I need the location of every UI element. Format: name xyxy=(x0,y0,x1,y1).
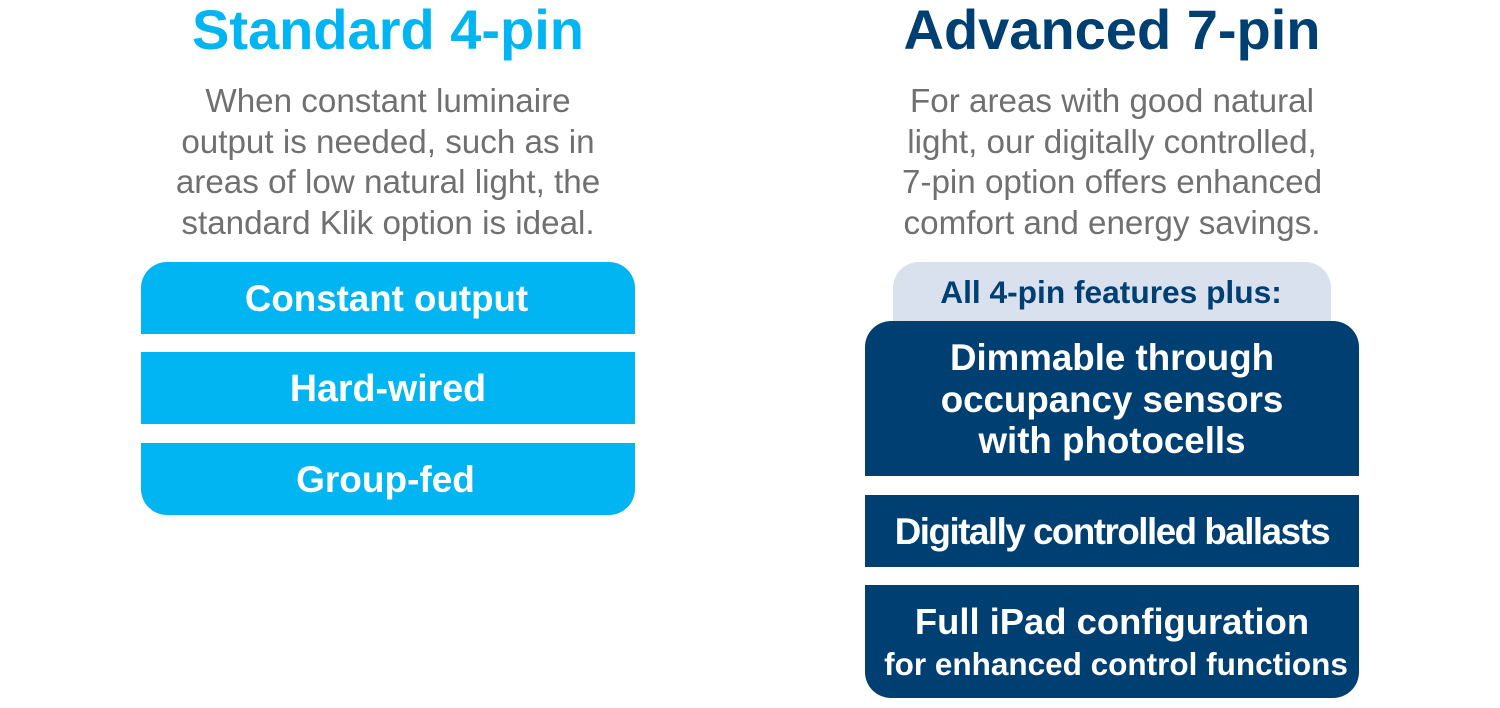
feature: Full iPad configuration: Full iPad configuration xyxy=(915,601,1309,642)
feature: Constant output: Constant output xyxy=(245,278,528,319)
feature: Hard-wired xyxy=(141,352,635,424)
panel: standard 4-pin xyxy=(176,0,600,242)
feature: Dimmable through occupancy sensors: with photocells xyxy=(978,420,1246,461)
feature: Dimmable through occupancy sensors: Dimmable through xyxy=(950,337,1274,378)
feature: Digitally controlled ballasts: Digitally controlled ballasts xyxy=(895,511,1329,552)
feature: Group-fed xyxy=(141,443,635,515)
text block: standard description: When constant luminaire xyxy=(205,83,571,120)
tab: All 4-pin features plus xyxy=(893,262,1331,332)
text block: advanced description: light, our digitally controlled, xyxy=(907,124,1317,161)
text block: advanced description: comfort and energy savings. xyxy=(904,205,1320,242)
text block: advanced description xyxy=(902,83,1322,242)
feature: Full iPad configuration xyxy=(865,585,1359,698)
feature: Hard-wired: Hard-wired xyxy=(290,367,486,409)
text block: standard description: standard Klik option is ideal. xyxy=(181,205,595,242)
tab: All 4-pin features plus: All 4-pin features plus: xyxy=(940,274,1282,310)
feature: Constant output xyxy=(141,262,635,334)
feature: Dimmable through occupancy sensors xyxy=(865,321,1359,476)
feature: Full iPad configuration: for enhanced control functions xyxy=(884,646,1348,682)
text block: standard description: areas of low natural light, the xyxy=(176,164,600,201)
feature: Group-fed: Group-fed xyxy=(296,459,475,500)
feature: Digitally controlled ballasts xyxy=(865,495,1359,567)
feature: Dimmable through occupancy sensors: occupancy sensors xyxy=(941,378,1283,420)
text block: standard description: output is needed, such as in xyxy=(181,124,595,161)
panel: advanced 7-pin xyxy=(902,0,1322,242)
text block: standard description xyxy=(176,83,600,242)
text block: advanced description: For areas with good natural xyxy=(910,83,1314,120)
text block: advanced description: 7-pin option offers enhanced xyxy=(902,164,1322,201)
